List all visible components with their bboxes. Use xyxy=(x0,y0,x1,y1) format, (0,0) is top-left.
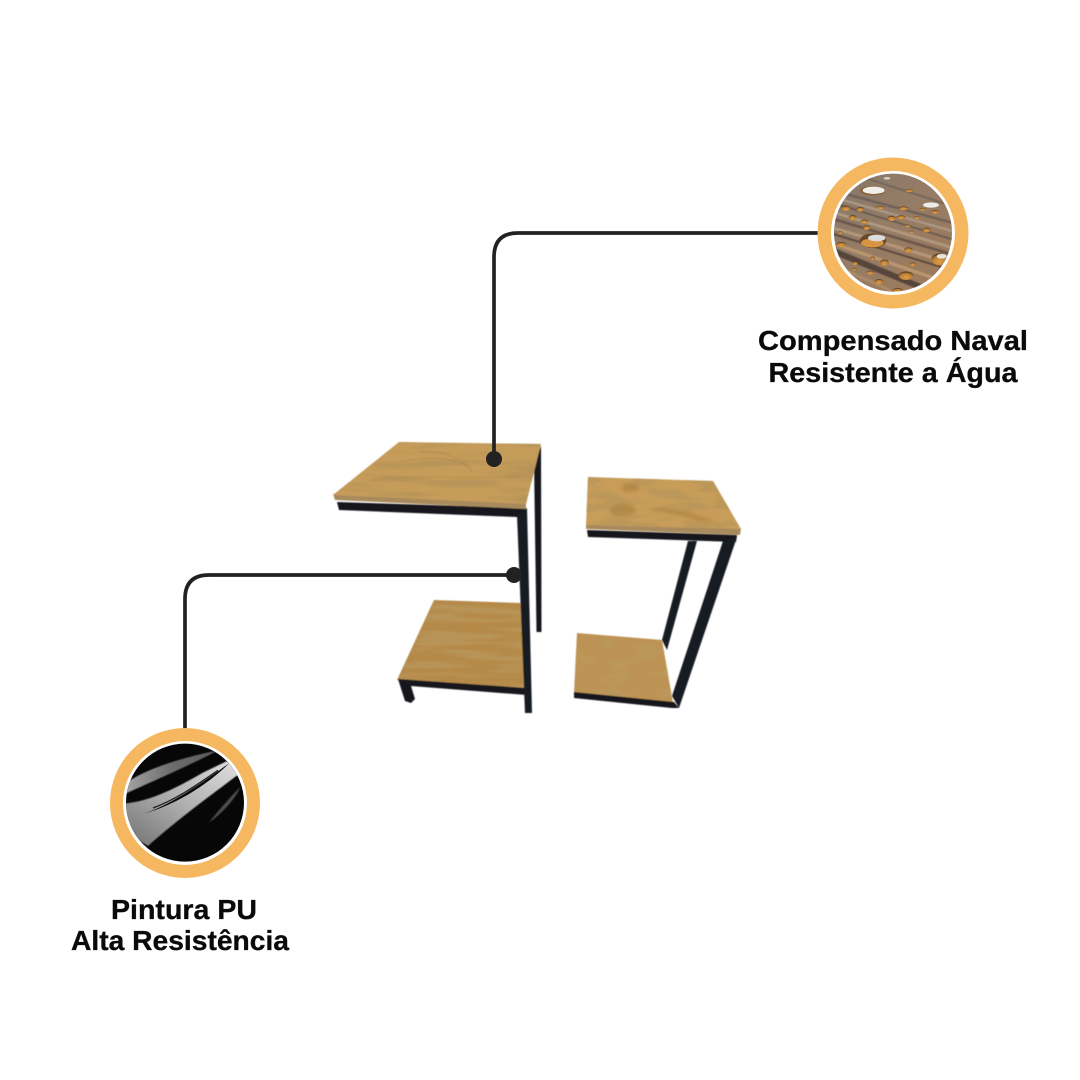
badge: glossy PU paint xyxy=(110,728,260,878)
connector: PU paint callout xyxy=(185,567,522,730)
badge: water-resistant wood xyxy=(818,158,968,308)
product: small side table xyxy=(574,477,741,708)
bottom shelf xyxy=(397,600,524,689)
tabletop edge xyxy=(586,524,741,535)
label: Compensado Naval: Resistente a Água xyxy=(768,357,1018,388)
front leg xyxy=(672,537,737,708)
label: Pintura PU: Alta Resistência xyxy=(71,925,289,956)
rear leg xyxy=(534,446,542,632)
under-top frame xyxy=(587,530,737,542)
rear leg xyxy=(662,541,697,650)
tabletop xyxy=(586,477,741,529)
lower frame xyxy=(574,692,679,708)
photo: water drops on wood xyxy=(831,170,955,294)
under-top frame xyxy=(337,502,526,517)
infographic canvas xyxy=(72,158,1026,950)
front leg xyxy=(517,508,532,713)
lower frame and short foot xyxy=(398,679,527,703)
photo: glossy black paint xyxy=(123,740,247,864)
connector: marine plywood callout xyxy=(486,233,818,467)
bottom shelf xyxy=(574,633,673,703)
tabletop edge xyxy=(333,494,526,509)
label: Compensado Naval xyxy=(758,325,1028,388)
label: Pintura PU: Pintura PU xyxy=(111,894,257,925)
product: large side table xyxy=(333,442,542,713)
tabletop xyxy=(333,442,541,504)
label: Compensado Naval: Compensado Naval xyxy=(758,325,1028,356)
label: Pintura PU xyxy=(71,894,289,956)
tabletop knots xyxy=(610,484,715,522)
tabletop grain xyxy=(370,452,520,480)
